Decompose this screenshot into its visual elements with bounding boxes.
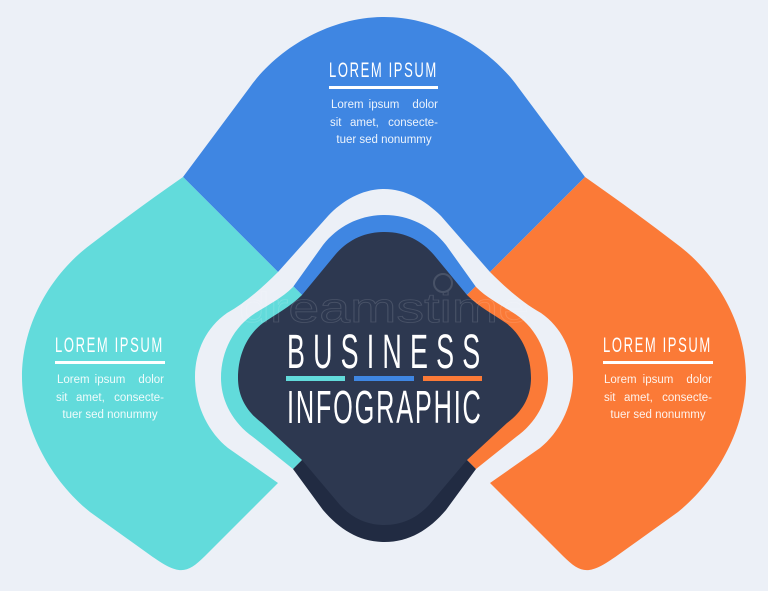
center ring segments <box>221 215 548 542</box>
title <box>286 326 488 433</box>
underline: teal <box>286 376 345 381</box>
text block: top panel: ipsum <box>369 99 399 111</box>
text block: left panel: amet, <box>76 392 105 404</box>
panel: blue top <box>183 17 585 272</box>
text block: top panel: Lorem <box>331 99 364 111</box>
text block: top panel: consecte- <box>388 117 438 129</box>
text block: left panel: tuer sed nonummy <box>62 409 158 421</box>
text block: right panel: Lorem <box>604 374 637 386</box>
text block: right panel: ipsum <box>643 374 673 386</box>
icon: watermark spiral <box>434 274 452 292</box>
text block: right panel: consecte- <box>662 392 712 404</box>
text block: right panel: tuer sed nonummy <box>610 409 706 421</box>
watermark <box>239 274 529 331</box>
text block: left panel: sit <box>56 392 68 404</box>
divider: right panel <box>603 361 713 364</box>
heading: right panel: LOREM IPSUM <box>603 333 712 357</box>
text block: left panel: Lorem <box>57 374 90 386</box>
title: INFOGRAPHIC <box>287 381 483 433</box>
divider: top panel <box>329 86 438 89</box>
text block: top panel: amet, <box>350 117 379 129</box>
text block: right panel: amet, <box>624 392 653 404</box>
text block: right panel: sit <box>604 392 616 404</box>
center dark shape <box>238 232 531 525</box>
panel: orange right <box>490 177 746 570</box>
underline: orange <box>423 376 482 381</box>
text block: top panel: tuer sed nonummy <box>336 134 432 146</box>
watermark: dreamstime <box>239 284 529 331</box>
text block: left panel: ipsum <box>95 374 125 386</box>
divider: left panel <box>55 361 165 364</box>
panel: teal left <box>22 177 278 570</box>
text block: top panel: sit <box>330 117 342 129</box>
heading: left panel: LOREM IPSUM <box>55 333 164 357</box>
text block: left panel: dolor <box>138 374 164 386</box>
text block: top panel: dolor <box>412 99 438 111</box>
text block: right panel: dolor <box>686 374 712 386</box>
underline: blue <box>354 376 414 381</box>
heading: top panel: LOREM IPSUM <box>329 58 438 82</box>
text block: left panel: consecte- <box>114 392 164 404</box>
title: BUSINESS <box>287 326 488 379</box>
